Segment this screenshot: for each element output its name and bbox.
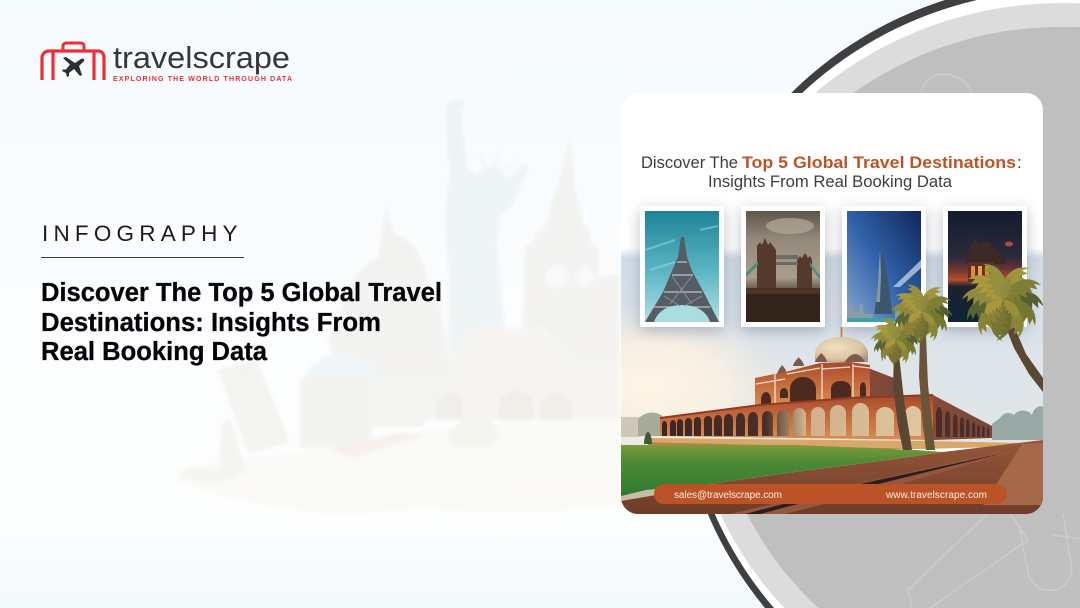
circle: faint plane outline xyxy=(908,74,1080,608)
circle: white band xyxy=(684,0,1080,608)
poster photo scene xyxy=(621,250,1043,514)
palm: left trunk xyxy=(893,355,912,450)
sky xyxy=(621,248,1043,448)
sun glow xyxy=(621,319,764,445)
right ground highlight xyxy=(983,443,1043,505)
logo icon: red suitcase with plane xyxy=(42,43,104,80)
circle: dark outline xyxy=(677,0,1080,608)
logo tagline: EXPLORING THE WORLD THROUGH DATA xyxy=(113,76,292,83)
tomb: arcade arches receding xyxy=(936,407,989,437)
palm: right trunk xyxy=(1007,326,1043,392)
card title: Top 5 Global Travel Destinations xyxy=(742,153,1016,172)
landmark: red roof xyxy=(330,432,424,458)
tomb: plinth xyxy=(648,438,1022,449)
tomb: upper iwan arches xyxy=(761,377,866,406)
dirt ground xyxy=(621,440,1043,514)
distant trees right xyxy=(992,406,1043,440)
palm trees xyxy=(870,261,1044,450)
landmark: Statue of Liberty xyxy=(445,100,529,364)
background: faded landmark collage xyxy=(178,100,620,514)
tomb: upper storey right side xyxy=(870,368,894,396)
tomb: plinth front shadow xyxy=(648,442,927,449)
landmark: Big Ben tower xyxy=(521,136,599,408)
distant trees left xyxy=(638,413,662,436)
landmark: arched bridge building xyxy=(425,328,620,420)
landmark: domed cathedral xyxy=(300,205,452,448)
main headline: Destinations: Insights From xyxy=(41,309,381,337)
main headline: Discover The Top 5 Global Travel xyxy=(41,279,442,307)
palm: center trunk xyxy=(919,335,935,450)
landmark: leaning tower xyxy=(218,358,290,454)
photo card: Eiffel Tower xyxy=(640,206,724,331)
card title xyxy=(641,153,1022,191)
lawn xyxy=(621,445,943,495)
card title: Discover The xyxy=(641,153,738,172)
landmark: foliage xyxy=(180,418,498,483)
divider under label xyxy=(41,257,244,258)
tomb: dome finial xyxy=(840,327,842,338)
main headline xyxy=(41,279,442,366)
small cypress xyxy=(644,432,652,444)
distant buildings left xyxy=(621,417,641,437)
decorative circle: rings and gray disc xyxy=(677,0,1080,608)
contact bar xyxy=(654,484,1007,504)
footer curb xyxy=(621,489,656,501)
landmark: Parliament wing xyxy=(588,274,620,415)
tomb: arcade arches front xyxy=(662,403,921,436)
main headline: Real Booking Data xyxy=(41,338,268,366)
heading label: INFOGRAPHY: INFOGRAPHY xyxy=(42,221,243,246)
card base xyxy=(621,93,1043,514)
circle: light gray band xyxy=(687,3,1080,608)
photo card: Tower Bridge xyxy=(741,206,825,331)
card title: Insights From Real Booking Data xyxy=(708,172,953,191)
palm: left crown xyxy=(870,316,921,366)
stone channel on ground xyxy=(730,452,1012,514)
logo wordmark: travelscrape xyxy=(113,40,290,75)
circle: mid gray disc xyxy=(711,27,1080,608)
photo card: Burj Khalifa xyxy=(842,206,926,331)
logo xyxy=(42,40,292,83)
photo card: Thai temple xyxy=(943,206,1027,331)
card title: : xyxy=(1017,153,1022,172)
panel: poster card xyxy=(621,93,1043,514)
tomb: side dome pavilions xyxy=(777,353,865,375)
tomb: lower parapet xyxy=(660,395,933,418)
Humayun's tomb xyxy=(648,327,1022,449)
landmark: ground island xyxy=(178,419,620,514)
tomb: dome xyxy=(815,337,868,362)
contact: email: sales@travelscrape.com xyxy=(674,490,782,501)
landmark: small spire xyxy=(218,417,246,473)
palm: center crown xyxy=(890,282,953,344)
contact: website: www.travelscrape.com xyxy=(885,490,987,501)
tomb: upper storey inlay xyxy=(756,364,870,406)
tomb: upper storey front xyxy=(755,362,870,407)
tomb: lower storey front xyxy=(660,395,933,440)
tomb: lower storey receding side xyxy=(933,395,992,440)
dark rail line xyxy=(745,453,1004,514)
palm: right crown xyxy=(961,261,1044,342)
